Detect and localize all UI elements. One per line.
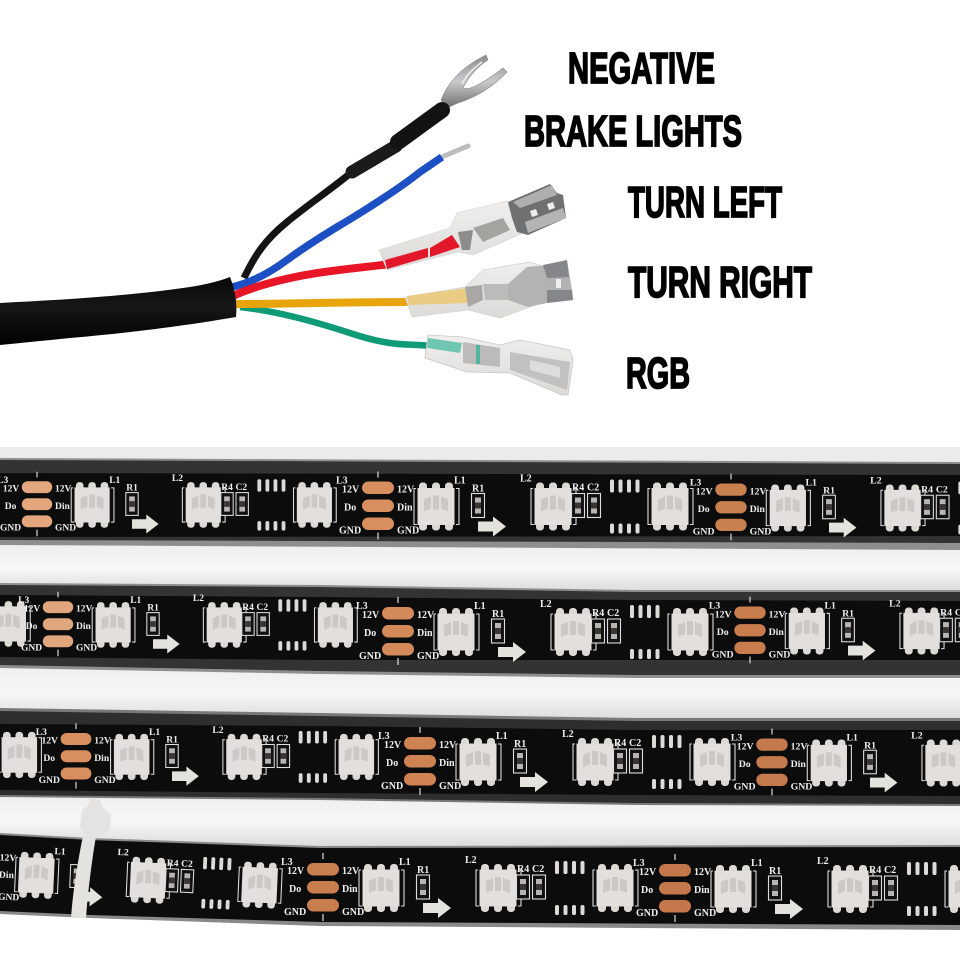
strip 4: L1 xyxy=(751,858,763,869)
strip 1: R4 xyxy=(221,483,233,493)
strip 4: 12V xyxy=(694,867,712,878)
strip 1: R1 xyxy=(472,484,484,494)
strip 2: Din xyxy=(417,628,433,639)
strip 2: 12V xyxy=(362,610,380,621)
strip 2: GND xyxy=(417,651,439,662)
strip 2: L1 xyxy=(130,596,142,606)
strip 1: L2 xyxy=(870,475,882,486)
strip 2: L3 xyxy=(709,600,720,611)
strip 2: 12V xyxy=(76,605,93,615)
strip 3: Do xyxy=(43,753,55,764)
strip backdrop: gap two xyxy=(0,666,960,720)
strip 3: 12V xyxy=(791,741,807,752)
strip 4: R4 xyxy=(869,865,881,876)
strip 1: 12V xyxy=(696,486,713,497)
strip 4: C2 xyxy=(884,865,896,876)
strip 1: 12V xyxy=(3,485,19,495)
strip 2: R1 xyxy=(492,609,504,620)
strip 3: R1 xyxy=(166,735,178,746)
strip 2: R4 xyxy=(242,603,254,613)
label: turn right: TURN RIGHT xyxy=(628,258,812,307)
strip 1: C2 xyxy=(936,484,948,495)
strip 4: R1 xyxy=(769,866,781,877)
strip 3: L2 xyxy=(212,725,224,736)
connector: red wire xyxy=(379,184,566,270)
strip 3: Din xyxy=(791,759,806,770)
strip 2: R4 xyxy=(940,607,952,618)
strip 3: GND xyxy=(381,781,403,792)
cable jacket xyxy=(0,277,236,345)
strip 3: C2 xyxy=(277,734,289,745)
strip 2: L3 xyxy=(18,596,29,606)
strip 4: GND xyxy=(694,908,716,919)
strip 3: Din xyxy=(439,758,455,769)
strip 1: Din xyxy=(397,502,413,514)
strip 4: Do xyxy=(289,884,301,895)
label: negative: NEGATIVE xyxy=(568,44,715,93)
wire: yellow xyxy=(234,302,410,304)
strip 3: R4 xyxy=(614,738,626,749)
strip 1: GND xyxy=(750,526,771,537)
wire: black with heat shrink and fork terminal xyxy=(244,55,507,278)
wire: green xyxy=(240,307,430,346)
strip 4: GND xyxy=(636,908,658,919)
strip 1: L1 xyxy=(454,476,466,486)
strip 1: L1 xyxy=(109,476,121,486)
strip 1: R1 xyxy=(823,485,835,496)
strip 3: GND xyxy=(39,775,60,786)
strip 2: GND xyxy=(712,649,734,660)
strip 2: 12V xyxy=(715,609,732,620)
strip 1: L2 xyxy=(172,474,183,484)
strip 1: L1 xyxy=(805,477,817,488)
strip 1: 12V xyxy=(55,485,72,495)
strip backdrop: gap one xyxy=(0,544,960,592)
strip 3: 12V xyxy=(439,740,457,751)
strip 3: Do xyxy=(386,758,398,769)
strip 2: Din xyxy=(76,622,92,632)
strip 4: Do xyxy=(641,885,653,896)
strip 1: GND xyxy=(55,524,76,534)
strip 3: Do xyxy=(739,759,751,770)
strip backdrop: upper edge xyxy=(0,447,960,465)
strip 3: L2 xyxy=(911,730,923,741)
strip 2: R4 xyxy=(592,608,604,619)
strip 2: 12V xyxy=(24,605,40,615)
strip 2: R1 xyxy=(842,608,854,619)
strip 2: L3 xyxy=(356,601,368,612)
strip 1: L2 xyxy=(520,474,532,484)
strip 1: L3 xyxy=(690,477,701,488)
strip 4: Din xyxy=(342,884,358,895)
strip 3: GND xyxy=(94,775,116,786)
strip 1: C2 xyxy=(236,483,247,493)
strip 3 xyxy=(0,708,960,806)
cable tie xyxy=(71,798,111,918)
strip 3: 12V xyxy=(41,736,58,747)
wire: blue xyxy=(232,146,468,287)
strip 1: Din xyxy=(750,504,765,515)
connector: green wire xyxy=(425,335,573,395)
strip 1: 12V xyxy=(750,486,766,497)
strip 2: L2 xyxy=(193,594,204,604)
strip 3: 12V xyxy=(94,736,111,747)
strip 3: Din xyxy=(94,753,110,764)
strip 2: L1 xyxy=(824,600,836,611)
strip 1: L3 xyxy=(336,476,348,486)
strip 3: GND xyxy=(439,781,461,792)
strip 1: R1 xyxy=(126,484,138,494)
strip 3: L2 xyxy=(562,729,574,740)
strip 1: GND xyxy=(0,524,21,534)
strip 3: R1 xyxy=(514,739,526,750)
strip 4: C2 xyxy=(532,864,544,875)
strip 4: L2 xyxy=(817,856,829,867)
strip 1: Do xyxy=(698,504,710,515)
strip 2: 12V xyxy=(769,609,785,620)
strip 1: Do xyxy=(5,502,17,512)
strip 1: 12V xyxy=(342,484,360,496)
strip 2: L2 xyxy=(889,598,901,609)
strip 4: 12V xyxy=(342,866,360,877)
strip 4: L2 xyxy=(117,847,129,859)
label: turn left: TURN LEFT xyxy=(628,178,782,227)
strip 3: GND xyxy=(791,781,812,792)
strip 2: 12V xyxy=(417,610,435,621)
strip 2: GND xyxy=(359,651,381,662)
strip 3: L1 xyxy=(846,732,858,743)
strip 3: R1 xyxy=(864,740,876,751)
strip 1: GND xyxy=(397,526,419,536)
strip 2: GND xyxy=(769,649,790,660)
strip 4: GND xyxy=(284,907,306,918)
strip 1: C2 xyxy=(587,482,599,494)
strip 4: C2 xyxy=(181,858,193,870)
strip 2: Do xyxy=(364,628,376,639)
strip 2: Do xyxy=(717,627,729,638)
strip 1: R4 xyxy=(572,482,584,494)
strip 3: C2 xyxy=(629,738,641,749)
strip 1: 12V xyxy=(397,484,415,496)
strip 4: 12V xyxy=(287,866,305,877)
wire: red xyxy=(233,264,390,296)
strip 2: GND xyxy=(76,644,97,654)
strip 1: GND xyxy=(339,526,361,536)
strip 4: L3 xyxy=(633,858,645,869)
strip 3: GND xyxy=(734,781,756,792)
strip 1: GND xyxy=(693,526,715,537)
strip 2: L2 xyxy=(540,599,552,610)
strip 4: R4 xyxy=(517,864,529,875)
strip 2: R1 xyxy=(147,604,159,614)
strip 3: L3 xyxy=(731,732,742,743)
strip 3: L3 xyxy=(36,727,47,738)
strip 1: Din xyxy=(55,502,71,512)
strip 4: L3 xyxy=(281,857,293,868)
strip 4: R4 xyxy=(167,858,179,869)
strip 4: 12V xyxy=(0,852,17,864)
strip 1: R4 xyxy=(921,484,933,495)
strip 1 xyxy=(0,458,960,550)
strip 4 xyxy=(0,833,960,930)
strip 3: L1 xyxy=(496,731,508,742)
strip 4: L1 xyxy=(399,857,411,868)
strip 2: C2 xyxy=(257,603,268,613)
strip 2: L1 xyxy=(474,601,486,612)
label: rgb: RGB xyxy=(626,349,690,398)
strip 4: 12V xyxy=(639,867,657,878)
strip 4: GND xyxy=(342,907,364,918)
strip 2: Din xyxy=(769,627,784,638)
strip 2: C2 xyxy=(607,608,619,619)
strip 4: L2 xyxy=(465,855,477,866)
strip 2: Do xyxy=(26,622,38,632)
strip 3: 12V xyxy=(737,741,754,752)
strip 2: GND xyxy=(21,644,42,654)
strip backdrop: gap three xyxy=(0,796,960,846)
strip 3: L1 xyxy=(149,727,160,738)
strip 3: L3 xyxy=(378,731,390,742)
strip 2 xyxy=(0,583,960,678)
strip 4: L1 xyxy=(54,846,66,858)
strip 4: R1 xyxy=(417,865,429,876)
strip 3: 12V xyxy=(384,740,402,751)
strip 1: Do xyxy=(344,502,356,514)
strip 3: R4 xyxy=(262,734,274,745)
strip 4: Din xyxy=(694,885,710,896)
connector: yellow wire xyxy=(405,260,573,318)
label: brake lights: BRAKE LIGHTS xyxy=(524,107,742,156)
